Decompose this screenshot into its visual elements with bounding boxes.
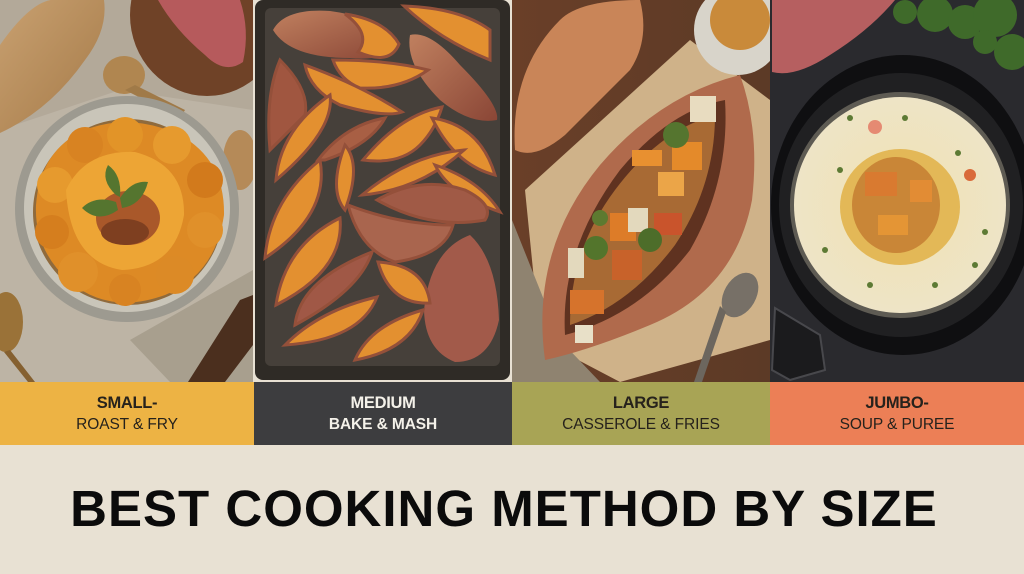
fork (694, 266, 766, 382)
raw sweet potato, left (0, 0, 105, 133)
raw sweet potato (772, 0, 895, 73)
label: jumbo, soup and puree (770, 382, 1024, 445)
panel: large, loaded baked potato (512, 0, 782, 382)
panel: medium, roasted wedges tray (253, 0, 512, 382)
label: small, roast and fry: ROAST & FRY (76, 416, 178, 433)
wedges (265, 6, 500, 360)
label: medium, bake and mash (254, 382, 512, 445)
label: small, roast and fry (0, 382, 254, 445)
pot handle (772, 308, 825, 380)
label: jumbo, soup and puree: JUMBO- (865, 394, 929, 412)
bowl top right (694, 0, 782, 75)
bowl (15, 96, 239, 322)
raw sweet potato (515, 0, 643, 153)
label: medium, bake and mash: BAKE & MASH (329, 416, 437, 433)
parsley (893, 0, 1024, 70)
label: large, casserole and fries (512, 382, 770, 445)
spoon lower left (0, 292, 35, 382)
label: small, roast and fry: SMALL- (97, 394, 157, 412)
panel: small, mashed bowl (0, 0, 284, 382)
raw sweet potato, pink (158, 0, 246, 67)
pot (771, 55, 1024, 355)
cutting board (130, 0, 284, 96)
photo strip: four sweet potato dishes (0, 0, 1024, 382)
label: large, casserole and fries: CASSEROLE & FRIES (562, 416, 720, 433)
mint leaves (82, 165, 148, 217)
panel: jumbo, soup pot (770, 0, 1024, 382)
label: large, casserole and fries: LARGE (613, 394, 669, 412)
filling (568, 96, 716, 343)
mashed sweet potato (35, 117, 224, 306)
baked sweet potato (542, 75, 754, 360)
whole sweet potatoes (273, 11, 398, 59)
soup (794, 97, 1006, 313)
title: BEST COOKING METHOD BY SIZE (70, 480, 938, 537)
spoon (103, 56, 185, 118)
label: medium, bake and mash: MEDIUM (350, 394, 416, 412)
label: jumbo, soup and puree: SOUP & PUREE (840, 416, 954, 433)
